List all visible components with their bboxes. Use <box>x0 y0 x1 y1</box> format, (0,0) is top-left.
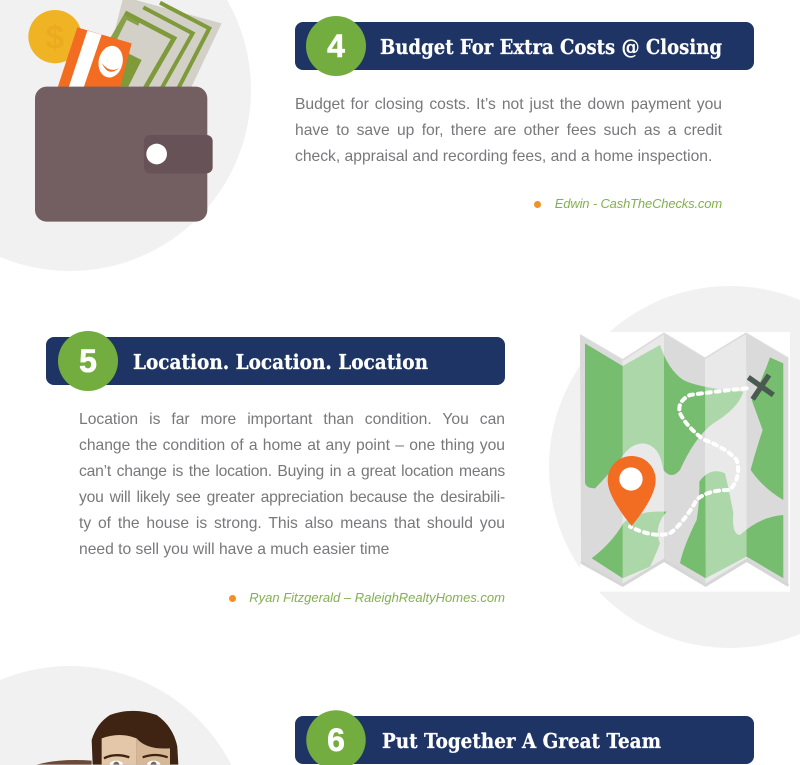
body text: tip 5 <box>79 411 505 558</box>
credit dot: tip 5 <box>229 595 236 602</box>
heading text: tip 6: Put Together A Great Team <box>382 729 661 753</box>
body text: tip 5: change the condition of a home at any point – one thing you <box>79 437 505 454</box>
number badge 6 <box>306 710 366 765</box>
body text: tip 5: need to sell you will have a much easier time <box>79 541 389 558</box>
icon: folded map with pin <box>580 332 790 592</box>
icon: team people <box>37 711 178 765</box>
body text: tip 5: can’t change is the location. Buying in a great location means <box>79 463 505 480</box>
panel: tip 5 <box>46 331 505 605</box>
icon: wallet with money <box>28 0 222 222</box>
number badge 6: 6 <box>327 722 345 758</box>
body text: tip 4: check, appraisal and recording fees, and a home inspection. <box>295 148 712 165</box>
panel: tip 4 <box>295 16 754 211</box>
heading bar: tip 6 <box>295 716 754 764</box>
number badge 4: 4 <box>327 28 345 64</box>
number badge 5 <box>58 331 118 391</box>
background circle: map <box>549 286 800 648</box>
heading bar: tip 5 <box>46 337 505 385</box>
heading text: tip 5: Location. Location. Location <box>133 350 428 374</box>
background circle: wallet <box>0 0 251 271</box>
body text: tip 5: Location is far more important than condition. You can <box>79 411 505 428</box>
panel: tip 6 <box>295 710 754 765</box>
body text: tip 5: you will likely see greater appreciation because the desirabili- <box>79 489 505 506</box>
body text: tip 4: Budget for closing costs. It’s not just the down payment you <box>295 96 722 113</box>
body text: tip 5: ty of the house is strong. This also means that should you <box>79 515 505 532</box>
background circle: team <box>0 666 231 765</box>
body text: tip 4: have to save up for, there are other fees such as a credit <box>295 122 722 139</box>
credit: tip 4: Edwin - CashTheChecks.com <box>555 196 722 211</box>
icon: wallet with money: $ <box>46 19 65 56</box>
number badge 5: 5 <box>79 343 97 379</box>
credit: tip 5: Ryan Fitzgerald – RaleighRealtyHomes.com <box>249 590 505 605</box>
body text: tip 4 <box>295 96 722 165</box>
number badge 4 <box>306 16 366 76</box>
credit dot: tip 4 <box>534 201 541 208</box>
heading bar: tip 4 <box>295 22 754 70</box>
